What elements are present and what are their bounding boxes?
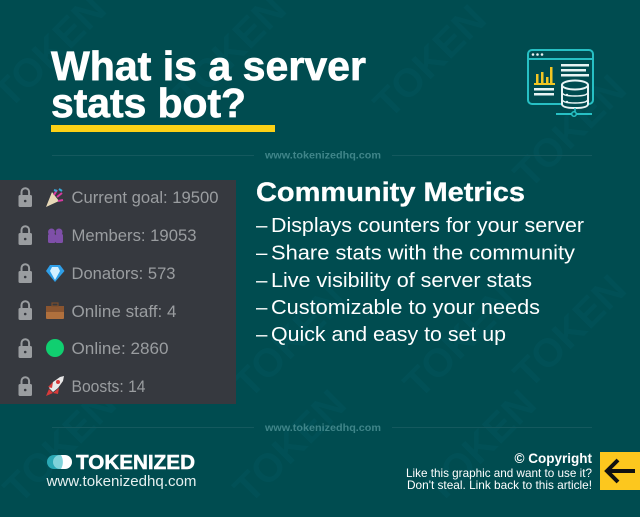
channel row: boosts: Boosts: 14	[72, 378, 146, 396]
title: What is a server	[51, 43, 366, 89]
text: TOKEN	[365, 0, 495, 126]
logo: tokenized	[45, 452, 196, 490]
logo: tokenized: TOKENIZED	[76, 452, 195, 474]
text: TOKEN	[225, 382, 355, 511]
title: stats bot?	[51, 80, 246, 126]
channel row: donators	[18, 264, 176, 283]
text: TOKEN	[225, 277, 355, 406]
channel row: members	[18, 226, 196, 245]
bullet list: –	[256, 269, 268, 292]
text: TOKEN	[505, 267, 635, 396]
channel row: online: Online: 2860	[72, 340, 168, 358]
bullet list: Quick and easy to set up	[271, 323, 506, 346]
copyright notice: Don't steal. Link back to this article!	[407, 478, 592, 492]
copyright notice: © Copyright	[515, 451, 592, 466]
channel row: boosts	[18, 376, 146, 396]
bullet list	[256, 214, 584, 346]
top divider: www.tokenizedhq.com	[264, 150, 381, 162]
channel row: online staff	[18, 301, 176, 321]
bullet list: –	[256, 296, 268, 319]
channel row: current goal: Current goal: 19500	[72, 189, 218, 207]
bullet list: Customizable to your needs	[271, 296, 540, 319]
text: TOKEN	[395, 277, 525, 406]
copyright notice: Like this graphic and want to use it?	[406, 466, 592, 480]
copyright notice	[406, 451, 592, 492]
icon: server stats window	[528, 50, 593, 116]
text: TOKEN	[415, 382, 545, 511]
title	[51, 43, 366, 126]
bullet list: –	[256, 242, 268, 264]
text: TOKEN	[505, 67, 635, 196]
title underline	[51, 125, 275, 132]
bullet list: –	[256, 323, 268, 346]
bullet list: Live visibility of server stats	[271, 269, 532, 292]
channel row: members: Members: 19053	[72, 227, 196, 245]
logo: tokenized: www.tokenizedhq.com	[45, 473, 196, 490]
channel row: online staff: Online staff: 4	[72, 303, 176, 321]
bullet list: Share stats with the community	[271, 242, 576, 264]
bullet list: Displays counters for your server	[271, 214, 584, 237]
channel row: donators: Donators: 573	[72, 265, 176, 283]
panel: channel list	[0, 180, 236, 404]
channel row: online	[18, 339, 168, 358]
arrow button	[600, 452, 640, 490]
heading: community metrics: Community Metrics	[256, 177, 525, 207]
bottom divider: www.tokenizedhq.com	[264, 423, 381, 434]
channel row: current goal	[18, 188, 218, 207]
bullet list: –	[256, 214, 268, 237]
